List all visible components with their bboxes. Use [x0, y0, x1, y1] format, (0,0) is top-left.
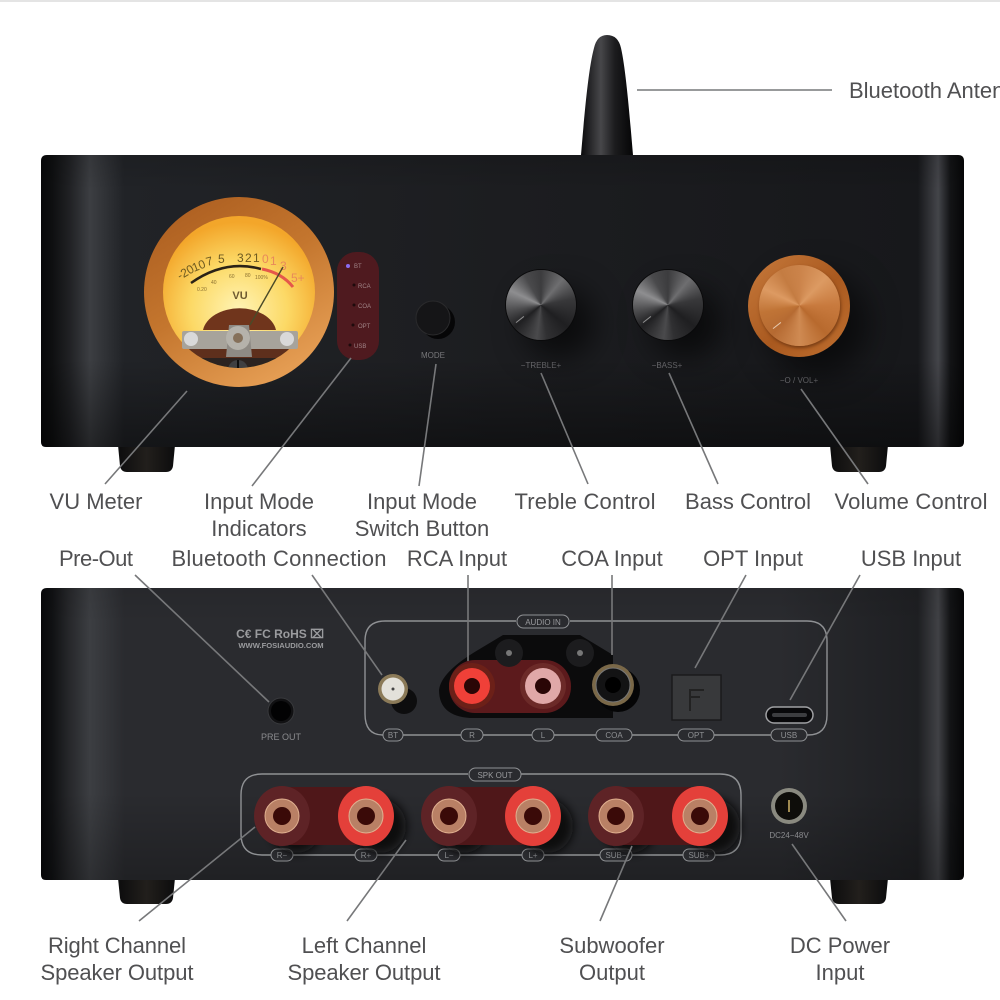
- bass knob: [633, 270, 703, 340]
- callout labels: Bluetooth Connection: [172, 546, 386, 571]
- input mode indicators panel: OPT: [358, 324, 371, 330]
- callout labels: DC Power: [790, 933, 890, 958]
- callout labels: OPT Input: [703, 546, 803, 571]
- VU meter: 2: [245, 251, 252, 265]
- pre-out jack: PRE OUT: [261, 732, 301, 742]
- callout labels: USB Input: [861, 546, 961, 571]
- VU meter: 3: [280, 259, 287, 273]
- speaker output frame: SUB−: [605, 851, 627, 860]
- input mode indicators panel: BT: [354, 264, 362, 270]
- certification marks: [236, 627, 324, 650]
- VU meter: 5: [218, 252, 225, 266]
- callout labels: Input Mode: [367, 489, 477, 514]
- certification marks: C€ FC RoHS ⌧: [236, 627, 324, 641]
- certification marks: WWW.FOSIAUDIO.COM: [238, 641, 324, 650]
- callout labels: Indicators: [211, 516, 307, 541]
- callout labels: Pre-Out: [59, 546, 133, 571]
- dc power input: [769, 788, 809, 840]
- VU meter: 40: [211, 280, 217, 286]
- VU meter: 1: [253, 251, 260, 265]
- audio in frame: COA: [605, 731, 623, 740]
- panel: front of amplifier: −O / VOL+: [780, 376, 818, 385]
- speaker output frame: R−: [277, 851, 288, 860]
- VU meter: 100%: [255, 275, 268, 281]
- callout labels: Speaker Output: [288, 960, 440, 985]
- audio in frame: R: [469, 731, 475, 740]
- callout labels: RCA Input: [407, 546, 507, 571]
- speaker output frame: [241, 768, 741, 861]
- VU meter: VU: [232, 290, 248, 302]
- VU meter: 5+: [291, 271, 305, 285]
- callout labels: Input: [816, 960, 864, 985]
- panel: front of amplifier: −TREBLE+: [521, 361, 562, 370]
- callout labels: Switch Button: [355, 516, 489, 541]
- VU meter: 1: [270, 254, 277, 268]
- speaker output frame: R+: [361, 851, 372, 860]
- optical input: [672, 675, 721, 720]
- VU meter: 10: [190, 257, 208, 275]
- top edge line: [0, 0, 1000, 2]
- RCA inputs: [439, 635, 640, 718]
- VU meter: 80: [245, 273, 251, 279]
- audio in frame: [365, 615, 827, 741]
- audio in frame: L: [541, 731, 546, 740]
- input mode indicators panel: [337, 252, 379, 360]
- input mode indicators panel: COA: [358, 304, 371, 310]
- VU meter: -20: [174, 262, 197, 283]
- icon: bluetooth antenna: [581, 35, 633, 155]
- callout labels: Output: [579, 960, 645, 985]
- callout labels: Right Channel: [48, 933, 186, 958]
- volume knob: [748, 255, 850, 357]
- callout labels: VU Meter: [50, 489, 142, 514]
- audio in frame: OPT: [688, 731, 704, 740]
- VU meter: 7: [204, 254, 215, 269]
- speaker output frame: SUB+: [688, 851, 710, 860]
- panel: rear of amplifier: [41, 588, 964, 904]
- pre-out jack: [261, 698, 301, 742]
- VU meter: 60: [229, 274, 235, 280]
- speaker output frame: L+: [528, 851, 538, 860]
- speaker terminals: [254, 786, 740, 853]
- audio in frame: USB: [781, 731, 797, 740]
- audio in frame: AUDIO IN: [525, 618, 561, 627]
- callout labels: Input Mode: [204, 489, 314, 514]
- VU meter: [144, 197, 334, 387]
- input mode indicators panel: RCA: [358, 284, 371, 290]
- leader lines: [105, 90, 868, 921]
- input mode indicators panel: USB: [354, 344, 366, 350]
- VU meter: 0: [262, 252, 269, 266]
- callout labels: COA Input: [561, 546, 663, 571]
- usb-c input: [766, 707, 813, 723]
- mode button: [416, 301, 455, 360]
- treble knob: [506, 270, 576, 340]
- callout labels: Bass Control: [685, 489, 811, 514]
- audio in frame: BT: [388, 731, 398, 740]
- dc power input: DC24−48V: [769, 831, 809, 840]
- callout labels: Left Channel: [302, 933, 426, 958]
- bluetooth connector: [378, 674, 417, 714]
- VU meter: 0.20: [197, 287, 207, 293]
- callout labels: Speaker Output: [40, 960, 194, 985]
- speaker output frame: L−: [444, 851, 454, 860]
- mode button: MODE: [421, 351, 445, 360]
- panel: front of amplifier: [41, 155, 964, 472]
- callout labels: Subwoofer: [559, 933, 665, 958]
- callout labels: Treble Control: [514, 489, 656, 514]
- speaker output frame: SPK OUT: [477, 771, 513, 780]
- callout labels: Volume Control: [834, 489, 988, 514]
- panel: front of amplifier: −BASS+: [652, 361, 683, 370]
- VU meter: 3: [237, 251, 244, 265]
